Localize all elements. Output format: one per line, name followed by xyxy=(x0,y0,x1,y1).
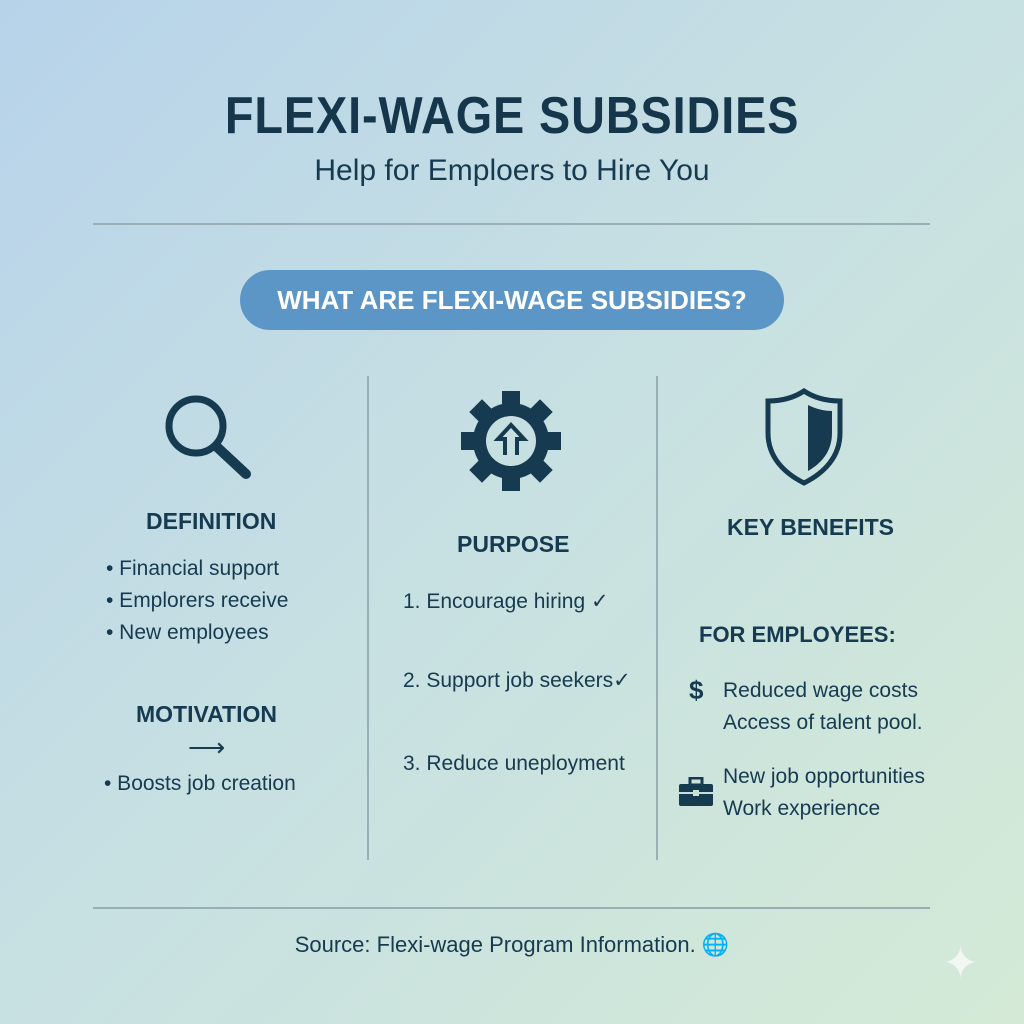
source footer: Source: Flexi-wage Program Information. 🌐 xyxy=(295,932,729,957)
text: wage: Access of talent pool. xyxy=(723,711,923,734)
icon: gear xyxy=(461,391,561,491)
panel: purpose: 3. Reduce uneployment xyxy=(403,752,625,775)
arrow: ⟶ xyxy=(188,732,225,762)
subheading: FOR EMPLOYEES: xyxy=(699,622,896,647)
icon: magnifier xyxy=(166,396,251,479)
list: purpose: 1. Encourage hiring ✓ xyxy=(403,590,609,613)
list: definition: • Financial support xyxy=(106,557,279,580)
heading: definition: DEFINITION xyxy=(146,508,276,534)
list: definition: • New employees xyxy=(106,621,269,644)
text: jobs xyxy=(723,765,925,820)
title: FLEXI-WAGE SUBSIDIES xyxy=(225,87,799,145)
heading: key benefits: KEY BENEFITS xyxy=(727,514,894,540)
panel: definition xyxy=(104,396,296,795)
text: jobs: New job opportunities xyxy=(723,765,925,788)
heading: motivation: MOTIVATION xyxy=(136,701,277,727)
text: jobs: Work experience xyxy=(723,797,880,820)
subtitle: Help for Emploers to Hire You xyxy=(314,154,710,187)
icon: dollar: $ xyxy=(689,675,703,705)
icon: briefcase xyxy=(679,777,713,806)
icon: sparkle: ✦ xyxy=(942,939,979,988)
section pill: WHAT ARE FLEXI-WAGE SUBSIDIES? xyxy=(277,285,747,315)
panel: purpose xyxy=(403,391,631,775)
text: wage: Reduced wage costs xyxy=(723,679,918,702)
text: motivation: • Boosts job creation xyxy=(104,772,296,795)
panel: key benefits xyxy=(679,388,925,820)
list: definition xyxy=(106,557,288,644)
list: definition: • Emplorers receive xyxy=(106,589,288,612)
panel: purpose: 2. Support job seekers✓ xyxy=(403,669,631,692)
section pill xyxy=(240,270,784,330)
icon: shield xyxy=(766,388,842,486)
heading: purpose: PURPOSE xyxy=(457,531,569,557)
text: wage xyxy=(723,679,923,734)
